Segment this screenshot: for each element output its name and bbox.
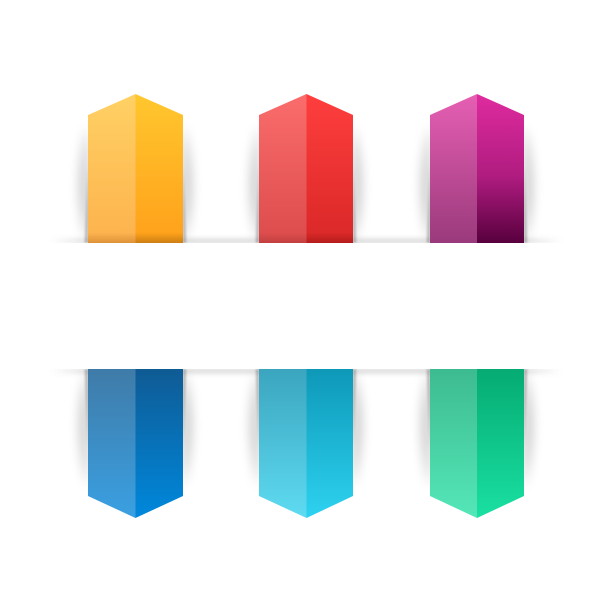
tab: green	[430, 369, 524, 518]
tab: yellow	[88, 94, 183, 243]
tab: magenta	[430, 94, 524, 243]
tab: cyan	[259, 369, 353, 518]
tab shadows: soft lens	[80, 125, 532, 487]
tab: red	[259, 94, 353, 243]
shadow: upper slit edge	[50, 238, 562, 244]
tab: blue	[88, 369, 183, 518]
tab shadows: thin contact edge	[85, 165, 527, 447]
shadow: lower slit edge	[50, 368, 562, 374]
white paper band	[0, 243, 612, 369]
